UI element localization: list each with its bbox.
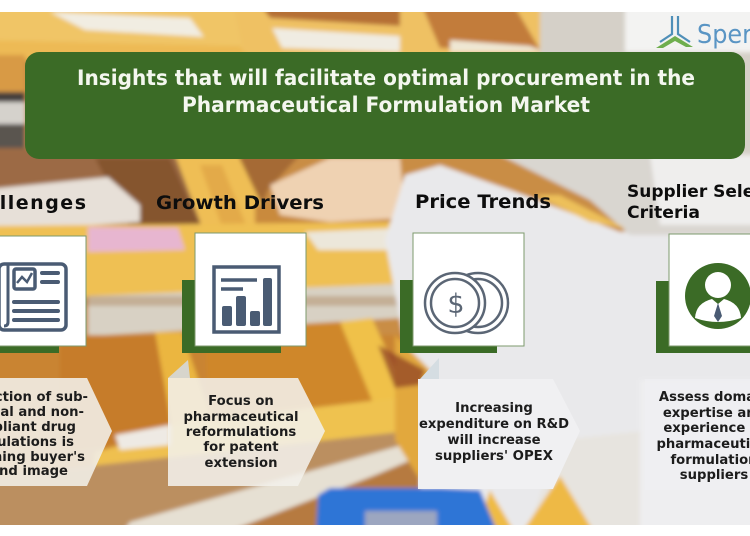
card: coins icon [400, 233, 524, 353]
heading: Supplier Selection Criteria: Criteria [627, 203, 700, 223]
callout: Growth Drivers text: Focus on [208, 394, 274, 409]
title banner [25, 52, 745, 159]
icon: newspaper [0, 264, 66, 330]
callout: Price Trends text: will increase [447, 433, 541, 448]
callout: Challenges text [0, 378, 112, 486]
callout: Supplier Selection text: suppliers [680, 468, 748, 483]
heading: Price Trends: Price Trends [415, 191, 551, 213]
card: report chart icon [182, 233, 306, 353]
callout: Price Trends text: suppliers' OPEX [435, 449, 553, 464]
column: Challenges [0, 192, 112, 486]
icon: dollar coins: $ [447, 289, 465, 320]
icon: bar chart report [214, 267, 279, 332]
icon: person with tie [685, 263, 750, 329]
callout: Price Trends text [418, 358, 580, 489]
callout: Growth Drivers text: pharmaceutical [183, 410, 299, 425]
title text: Insights that will facilitate optimal procurement in the [77, 66, 695, 90]
heading: Growth Drivers: Growth Drivers [156, 192, 324, 214]
callout: Growth Drivers text [168, 360, 325, 486]
logo: Spend Edge mark and partial wordmark [656, 16, 750, 50]
card: business person icon [656, 234, 750, 353]
card: newspaper icon [0, 236, 86, 353]
callout: Price Trends text: expenditure on R&D [419, 417, 569, 432]
heading: Supplier Selection Criteria [627, 182, 750, 223]
callout: Growth Drivers text: extension [205, 456, 277, 471]
column: Supplier Selection Criteria [627, 182, 750, 490]
title text [77, 66, 695, 117]
callout: Growth Drivers text: reformulations [186, 425, 296, 440]
title text: Pharmaceutical Formulation Market [182, 93, 590, 117]
column: Growth Drivers [156, 192, 325, 486]
callout: Price Trends text: Increasing [455, 401, 533, 416]
callout: Supplier Selection text [645, 379, 750, 490]
callout: Growth Drivers text: for patent [203, 440, 279, 455]
column: Price Trends [400, 191, 580, 489]
